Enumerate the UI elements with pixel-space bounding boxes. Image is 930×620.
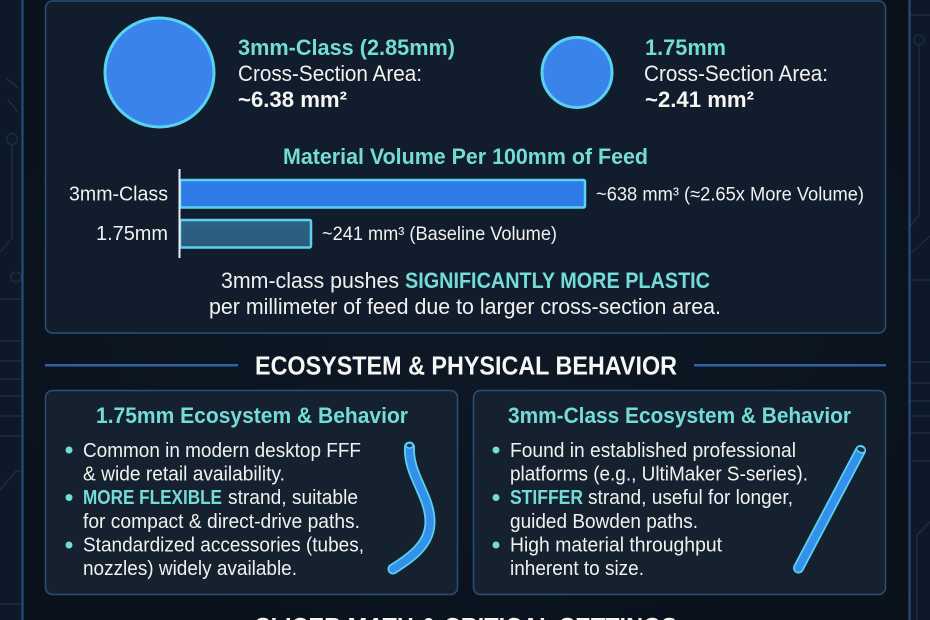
bullet list: 1.75mm: Common in modern desktop FFF [83, 439, 361, 462]
bullet list: 1.75mm: strand, suitable [228, 486, 358, 509]
bullet list: 3mm-class: Found in established professional [510, 439, 796, 462]
bullet list: 1.75mm: for compact & direct-drive paths. [83, 510, 360, 533]
bar: 1.75mm: ~241 mm³ (Baseline Volume) [322, 223, 557, 245]
bar: 3mm-class [69, 180, 864, 208]
bar chart: material volume per 100mm [69, 169, 864, 258]
heading: 1.75mm ecosystem: 1.75mm Ecosystem & Behavior [96, 403, 408, 428]
label: 3mm-class cross-section: Cross-Section Area: [238, 61, 422, 86]
icon: 1.75mm cross-section circle [542, 38, 612, 108]
label: 3mm-class cross-section [238, 35, 455, 112]
label: 3mm-class cross-section: ~6.38 mm² [238, 87, 347, 112]
bar: 3mm-class: 3mm-Class [69, 182, 168, 206]
bar: 1.75mm [96, 220, 557, 248]
label: 3mm-class cross-section: 3mm-Class (2.85mm) [238, 35, 455, 60]
bullet list: 3mm-class: inherent to size. [510, 557, 644, 580]
bullet list: 3mm-class: platforms (e.g., UltiMaker S-series). [510, 462, 808, 486]
bullet list: 3mm-class [492, 439, 808, 580]
bar: 3mm-class: ~638 mm³ (≈2.65x More Volume) [596, 184, 864, 206]
bullet list: 3mm-class: guided Bowden paths. [510, 510, 698, 533]
callout: more plastic per millimeter: 3mm-class pushes [221, 268, 399, 293]
heading: material volume: Material Volume Per 100mm of Feed [283, 144, 648, 169]
callout: more plastic per millimeter [209, 268, 721, 319]
bullet list: 3mm-class: STIFFER [510, 486, 583, 509]
label: 1.75mm cross-section: 1.75mm [645, 35, 726, 60]
bullet list: 3mm-class: High material throughput [510, 534, 722, 556]
panel: cross-section and material volume [46, 1, 886, 333]
bullet list: 1.75mm: nozzles) widely available. [83, 557, 297, 580]
callout: more plastic per millimeter: per millimeter of feed due to larger cross-section area. [209, 294, 721, 319]
callout: more plastic per millimeter: SIGNIFICANTLY MORE PLASTIC [405, 268, 710, 293]
bullet list: 1.75mm: & wide retail availability. [83, 462, 285, 486]
panel: 1.75mm ecosystem [46, 390, 458, 594]
icon: 3mm-class cross-section circle [105, 18, 214, 127]
bullet list: 3mm-class: strand, useful for longer, [588, 486, 793, 509]
label: 1.75mm cross-section: ~2.41 mm² [645, 87, 754, 112]
icon: stiff straight filament [798, 445, 866, 568]
bar: 1.75mm: 1.75mm [96, 222, 168, 245]
bullet list: 1.75mm: MORE FLEXIBLE [83, 486, 222, 509]
panel: 3mm-class ecosystem [474, 390, 886, 594]
label: 1.75mm cross-section [644, 35, 828, 112]
bullet list: 1.75mm [66, 439, 364, 580]
section heading: ecosystem and physical behavior: ECOSYSTEM & PHYSICAL BEHAVIOR [255, 350, 677, 380]
heading: 3mm-class ecosystem: 3mm-Class Ecosystem & Behavior [508, 403, 851, 428]
bullet list: 1.75mm: Standardized accessories (tubes, [83, 534, 364, 556]
label: 1.75mm cross-section: Cross-Section Area: [644, 61, 828, 86]
icon: flexible curved filament [393, 443, 430, 569]
